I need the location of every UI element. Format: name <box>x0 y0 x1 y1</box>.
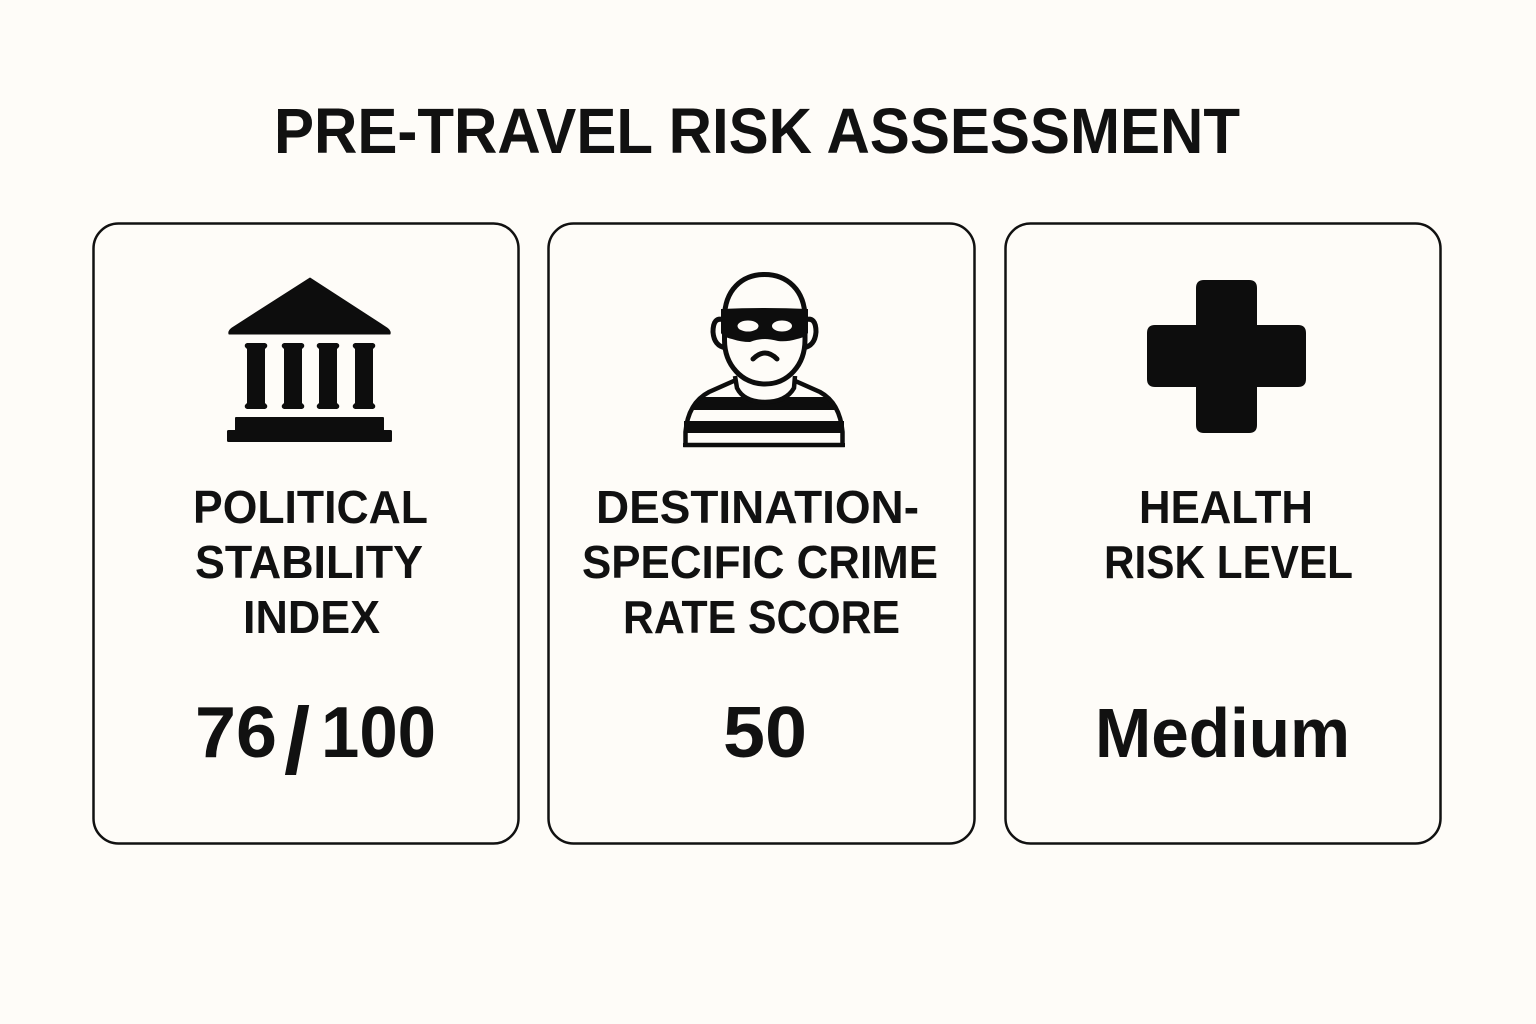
icon: government building <box>227 278 392 442</box>
panel: political stability <box>94 224 518 844</box>
label: destination-specific crime rate score: RATE SCORE <box>623 591 900 643</box>
label: destination-specific crime rate score: DESTINATION- <box>596 481 919 533</box>
value: 76/100: / <box>284 688 310 793</box>
icon: masked thief <box>683 274 845 447</box>
label: health risk level: RISK LEVEL <box>1104 536 1353 588</box>
icon: medical cross <box>1147 280 1306 433</box>
label: political stability index: INDEX <box>243 591 380 643</box>
label: destination-specific crime rate score: SPECIFIC CRIME <box>582 536 938 588</box>
value: 76/100: 100 <box>321 693 436 773</box>
label: destination-specific crime rate score <box>582 481 938 643</box>
label: health risk level: HEALTH <box>1139 481 1313 533</box>
panel: health risk <box>1006 224 1440 844</box>
title: PRE-TRAVEL RISK ASSESSMENT <box>274 95 1240 167</box>
label: political stability index: STABILITY <box>195 536 423 588</box>
value: Medium: Medium <box>1095 694 1350 772</box>
card outline <box>548 224 974 844</box>
value: 76/100 <box>195 688 436 793</box>
label: health risk level <box>1104 481 1353 588</box>
value: 76/100: 76 <box>195 693 277 773</box>
panel: crime rate <box>548 224 974 844</box>
label: political stability index: POLITICAL <box>193 481 428 533</box>
card outline <box>94 224 518 844</box>
label: political stability index <box>193 481 428 643</box>
card outline <box>1006 224 1440 844</box>
value: 50: 50 <box>723 693 807 773</box>
